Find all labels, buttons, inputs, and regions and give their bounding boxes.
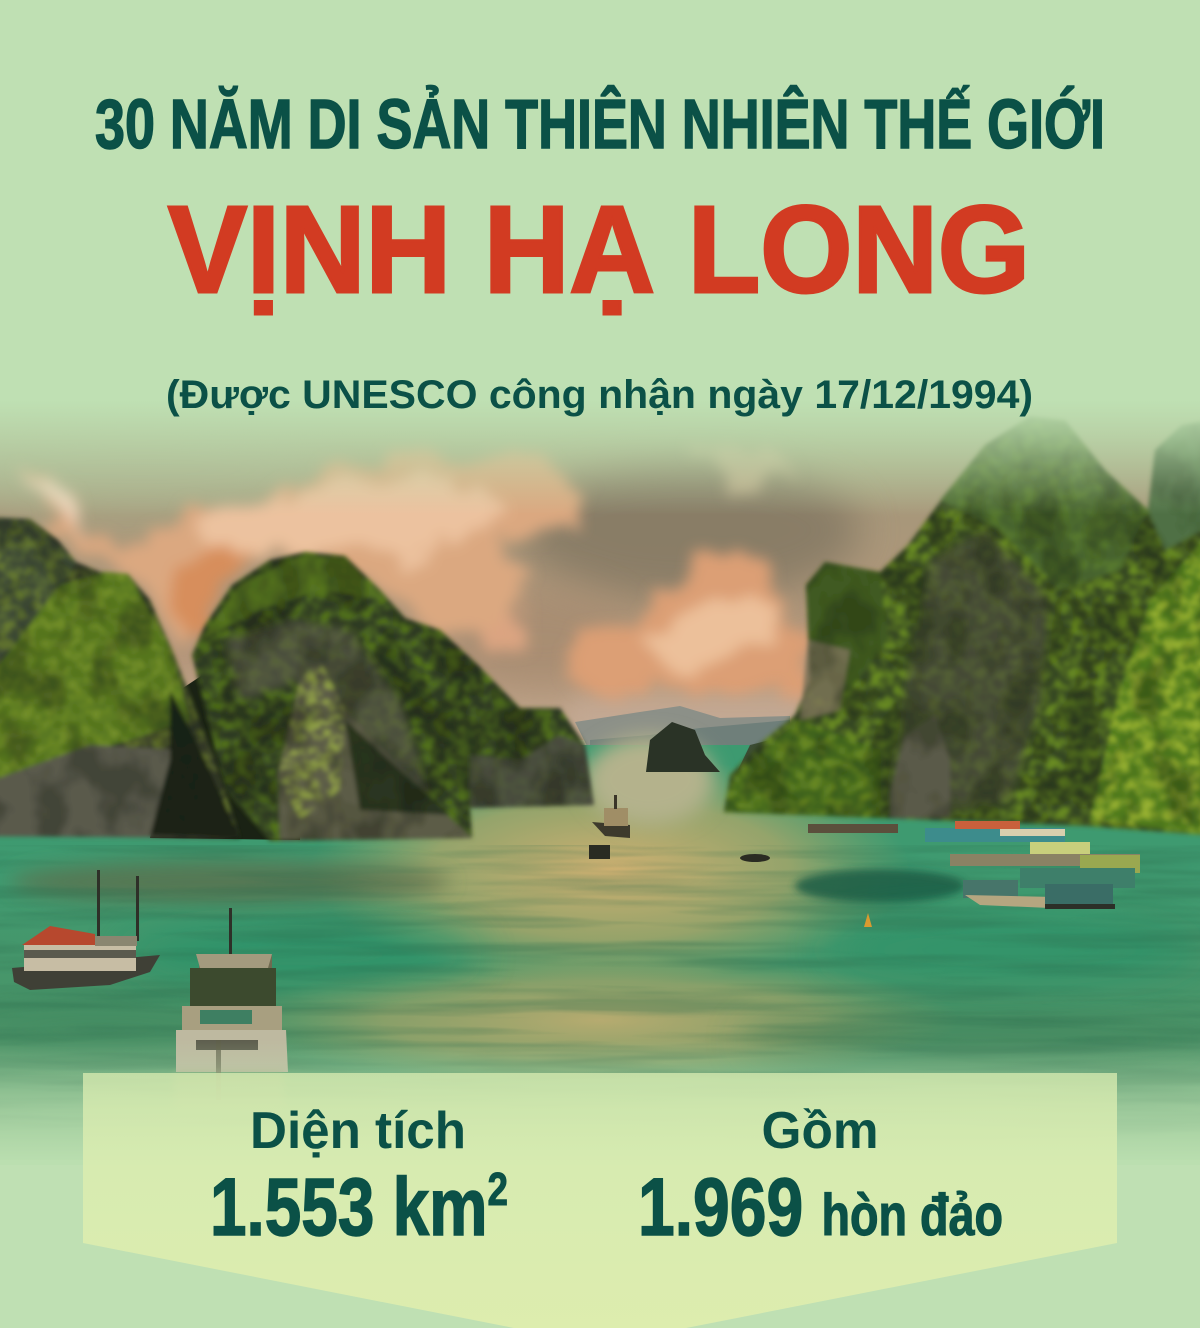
clouds bbox=[20, 445, 810, 695]
photo: Ha Long Bay landscape bbox=[0, 400, 1200, 1165]
panel background with arrow point bbox=[83, 1073, 1117, 1328]
sky bbox=[0, 400, 1200, 740]
stat: area value: 1.553 km bbox=[210, 1162, 556, 1253]
panel: key figures bbox=[83, 1073, 1117, 1328]
subtitle: (Được UNESCO công nhận ngày 17/12/1994) bbox=[166, 373, 1033, 417]
karst: back left ridge bbox=[192, 552, 594, 841]
fades into background bbox=[0, 400, 1200, 1165]
karst: central islet bbox=[646, 722, 775, 772]
distant mountains bbox=[575, 697, 798, 745]
stat: area value: 2 bbox=[488, 1163, 508, 1215]
cruise boat left bbox=[12, 870, 160, 990]
karst: right massif bbox=[724, 416, 1200, 836]
stat: islands label: Gồm bbox=[762, 1102, 878, 1160]
water bbox=[0, 735, 1200, 1165]
karst: far left mountain bbox=[0, 517, 240, 838]
karst: shadow gap between left mountains bbox=[150, 670, 300, 840]
title: main: VỊNH HẠ LONG bbox=[168, 182, 1030, 319]
stat: area label: Diện tích bbox=[250, 1102, 466, 1160]
floating fishing village bbox=[808, 821, 1140, 909]
small boats on the water bbox=[589, 795, 872, 927]
stat: islands value: 1.969 hòn đảo bbox=[638, 1162, 1003, 1253]
cruise boat centre bbox=[175, 908, 288, 1073]
